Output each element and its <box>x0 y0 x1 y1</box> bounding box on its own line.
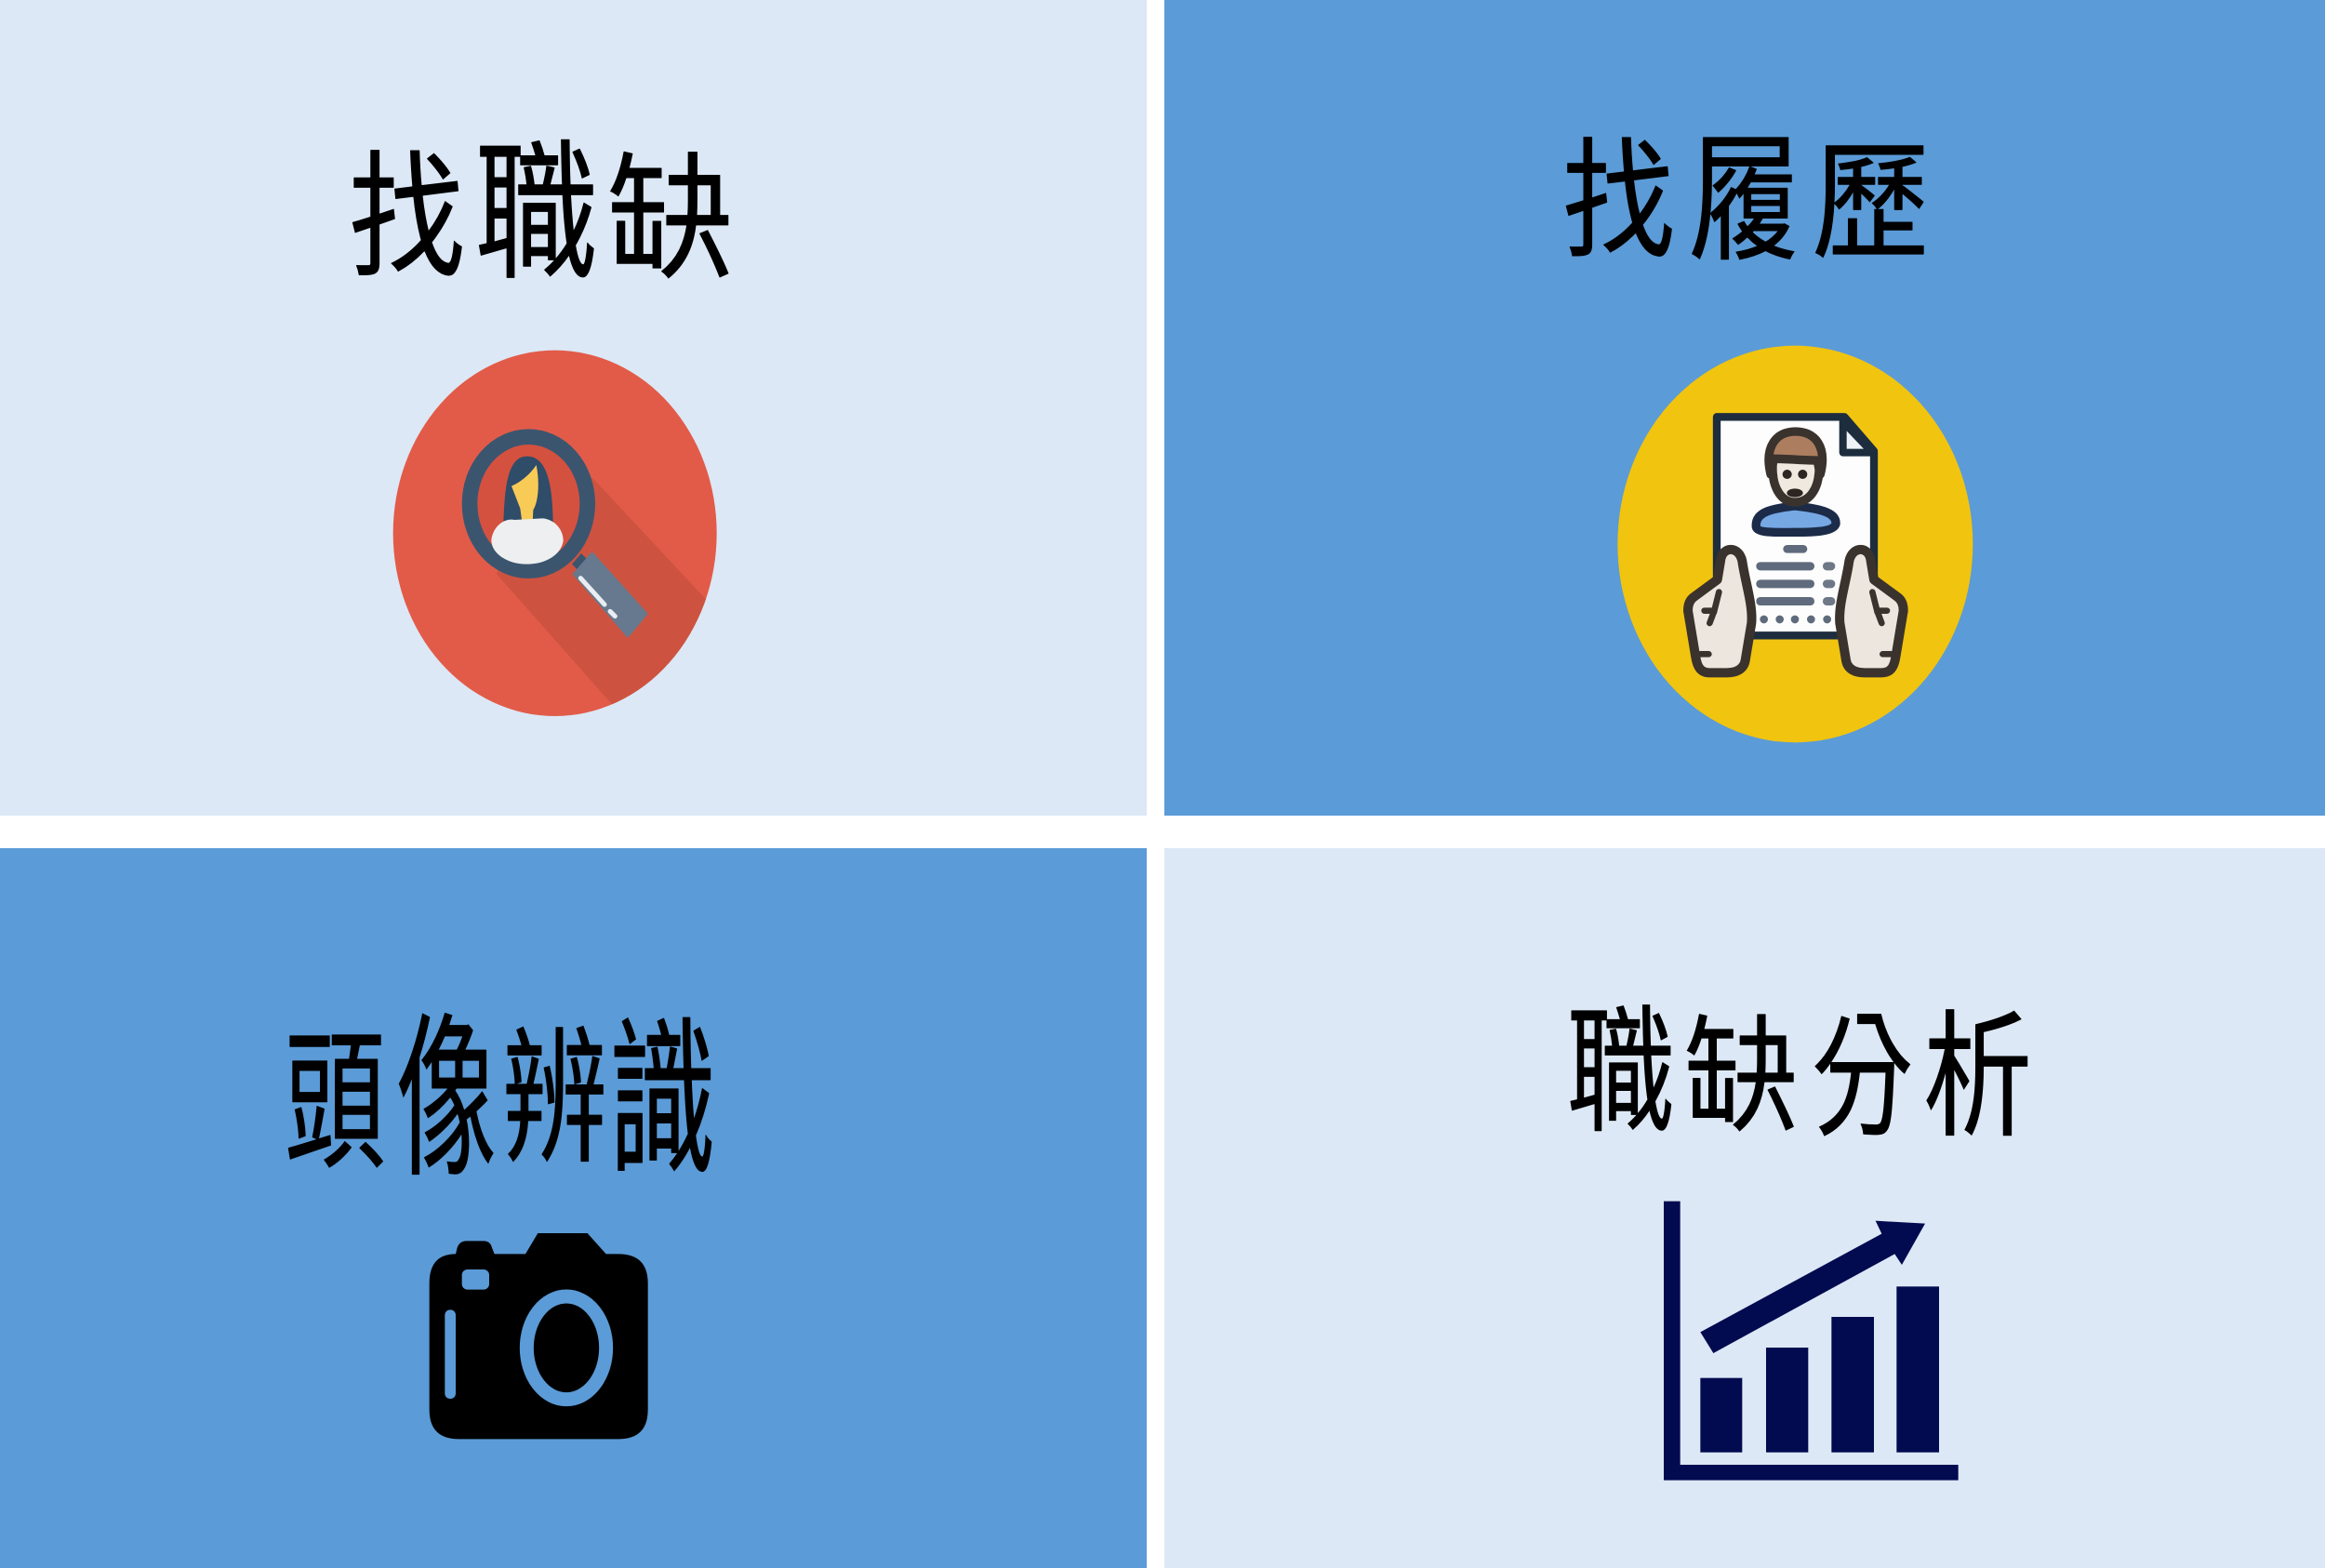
heading: face recognition: 辨 <box>502 1018 607 1182</box>
panel: job analysis <box>1164 848 2325 1568</box>
heading: face recognition: 識 <box>609 1008 716 1195</box>
heading: find resumes: 找 <box>1562 129 1675 274</box>
icon: camera <box>430 1233 648 1439</box>
heading: job analysis <box>1567 997 2032 1154</box>
heading: find resumes: 歷 <box>1812 132 1930 275</box>
heading: face recognition: 頭 <box>285 1019 385 1188</box>
icon: rising bar chart <box>1664 1202 1959 1481</box>
heading: job analysis: 分 <box>1812 1003 1913 1154</box>
heading: face recognition: 像 <box>396 1002 497 1199</box>
heading: find resumes: 履 <box>1689 124 1800 278</box>
panel: face recognition <box>0 848 1147 1568</box>
heading: job analysis: 職 <box>1567 997 1675 1149</box>
icon: hands holding resume <box>1617 346 1973 742</box>
heading: face recognition <box>285 1002 716 1199</box>
heading: job analysis: 析 <box>1923 1002 2032 1154</box>
panel: find resumes <box>1164 0 2325 816</box>
heading: find jobs: 缺 <box>607 143 733 296</box>
heading: find jobs: 找 <box>349 140 465 294</box>
heading: find jobs: 職 <box>475 131 598 298</box>
heading: find jobs <box>349 131 733 298</box>
heading: find resumes <box>1562 124 1930 278</box>
icon: magnifying glass over person <box>393 351 725 716</box>
panel: find jobs <box>0 0 1147 816</box>
heading: job analysis: 缺 <box>1684 1007 1798 1148</box>
